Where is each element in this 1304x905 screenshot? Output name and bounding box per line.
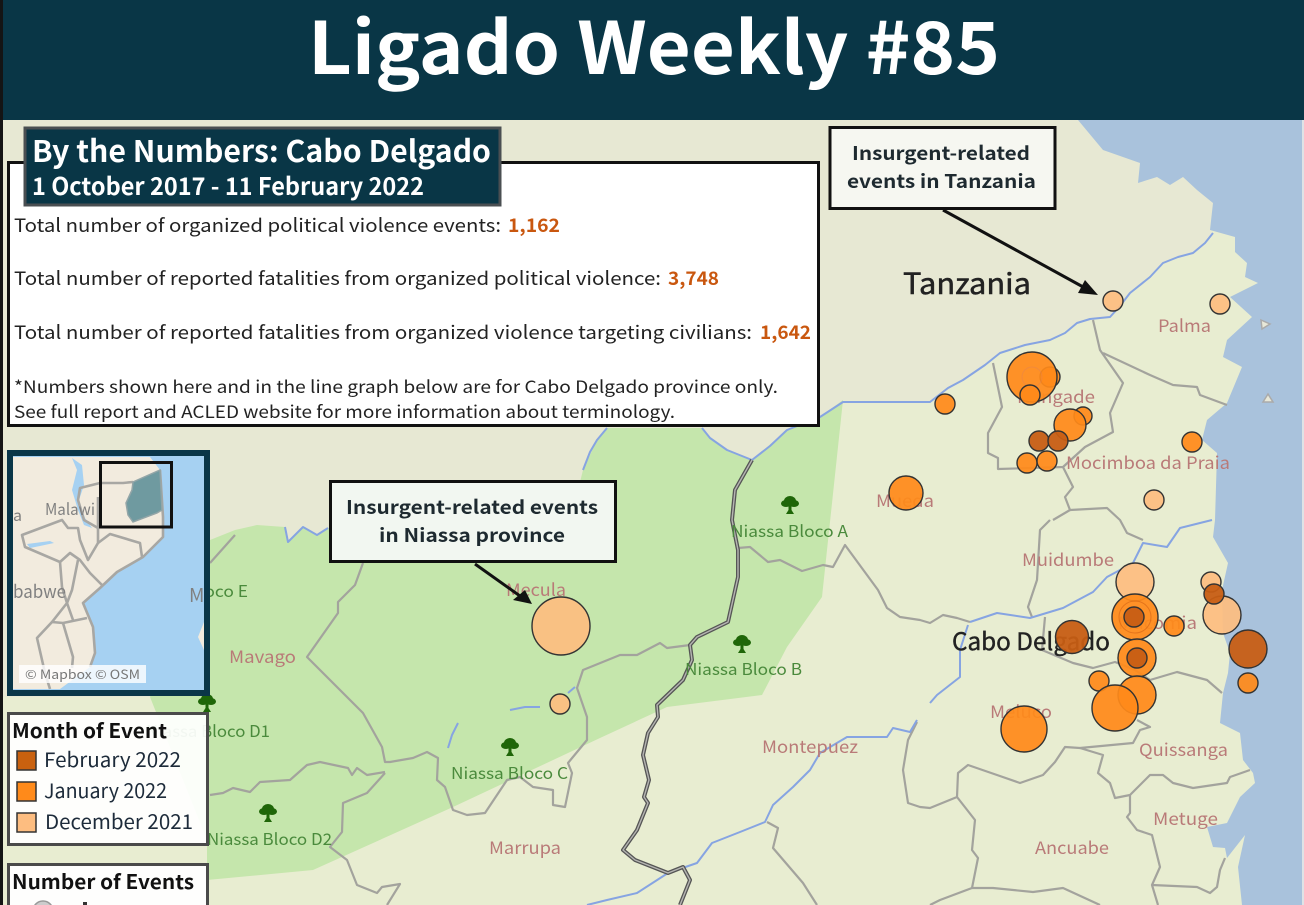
town labels: Macomia [1118, 609, 1197, 634]
reserve bloc labels and tree icons: Niassa Bloco D2 [207, 826, 332, 850]
stat: civilian fatalities: 1,642 [760, 319, 811, 345]
arrow: Niassa callout [475, 564, 532, 604]
country label: Cabo Delgado: Cabo Delgado [952, 622, 1110, 657]
town labels: Marrupa [489, 834, 561, 859]
reserve bloc labels and tree icons [131, 496, 848, 850]
callout: Tanzania: events in Tanzania [847, 167, 1036, 194]
footnote: *Numbers shown here and in the line graph below are for Cabo Delgado province only. [14, 373, 778, 398]
legend: number of events: Number of Events [12, 866, 194, 895]
town labels [229, 312, 1230, 859]
callout: Niassa: Insurgent-related events [346, 493, 598, 520]
stat: civilian fatalities: Total number of reported fatalities from organized violence targeting civilians: [14, 319, 752, 345]
legend item: February 2022: February 2022 [44, 744, 181, 773]
town labels: Muidumbe [1022, 546, 1114, 571]
legend: month of event [8, 714, 208, 844]
reserve bloc labels and tree icons: Niassa Bloco D1 [146, 718, 270, 742]
rivers [285, 233, 1213, 905]
legend item: December 2021: December 2021 [45, 806, 193, 835]
town labels: Mecula [506, 576, 566, 601]
inset locator map [10, 453, 207, 693]
province highlight: Cabo Delgado [126, 470, 162, 522]
town labels: Montepuez [762, 733, 858, 758]
arrow: Tanzania callout [943, 210, 1098, 295]
heading: by the numbers: By the Numbers: Cabo Delgado [32, 127, 491, 171]
inset locator map: Malawi [45, 496, 95, 520]
callout: Tanzania: Insurgent-related [852, 139, 1030, 166]
callout: Niassa [330, 482, 616, 562]
reserve bloc labels and tree icons: Niassa Bloco C [451, 760, 568, 784]
inset locator map: © Mapbox © OSM [25, 664, 140, 683]
panel: by the numbers [8, 162, 818, 426]
reserve bloc labels and tree icons: Niassa Bloco B [685, 656, 802, 680]
legend: number of events [8, 864, 208, 905]
town labels: Meluco [990, 698, 1052, 723]
event circles: southern Cabo Delgado [1001, 563, 1267, 752]
inset locator map: M [189, 581, 204, 608]
town labels: Quissanga [1139, 736, 1228, 761]
header band [0, 0, 1304, 120]
ocean [1078, 120, 1302, 905]
tanzania land area [0, 120, 1213, 697]
inset locator map: a [13, 502, 22, 526]
stat: total events: 1,162 [508, 212, 560, 238]
provincial boundary: Niassa and Cabo Delgado [623, 460, 752, 905]
country label: Tanzania: Tanzania [903, 261, 1031, 303]
town labels: Mocimboa da Praia [1066, 449, 1230, 474]
niassa reserve green area [150, 400, 843, 880]
province borders [210, 320, 1250, 905]
town labels: Ancuabe [1035, 834, 1109, 859]
town labels: Mavago [229, 643, 296, 668]
stat: total events: Total number of organized political violence events: [14, 212, 501, 238]
event circles: Niassa [532, 597, 590, 714]
town labels: Nangade [1017, 383, 1095, 408]
callout: Tanzania [830, 128, 1055, 208]
stat: total fatalities: 3,748 [668, 265, 719, 291]
inset locator map: babwe [13, 578, 66, 604]
legend: month of event: Month of Event [12, 715, 168, 744]
town labels: Metuge [1153, 805, 1218, 830]
reserve bloc labels and tree icons: Niassa Bloco A [731, 518, 848, 542]
stat: total fatalities: Total number of reported fatalities from organized political violence: [14, 265, 661, 291]
town labels: Mueda [876, 487, 934, 512]
heading: by the numbers: 1 October 2017 - 11 February 2022 [32, 167, 424, 202]
reserve bloc labels and tree icons: Niassa Bloco E [131, 578, 248, 602]
heading: by the numbers [25, 127, 500, 205]
event circles: northern Cabo Delgado and Tanzania [889, 291, 1230, 510]
town labels: Palma [1158, 312, 1211, 337]
footnote: See full report and ACLED website for more information about terminology. [14, 398, 675, 423]
callout: Niassa: in Niassa province [379, 521, 565, 548]
footnote [14, 373, 778, 423]
legend item: January 2022: January 2022 [44, 775, 167, 804]
